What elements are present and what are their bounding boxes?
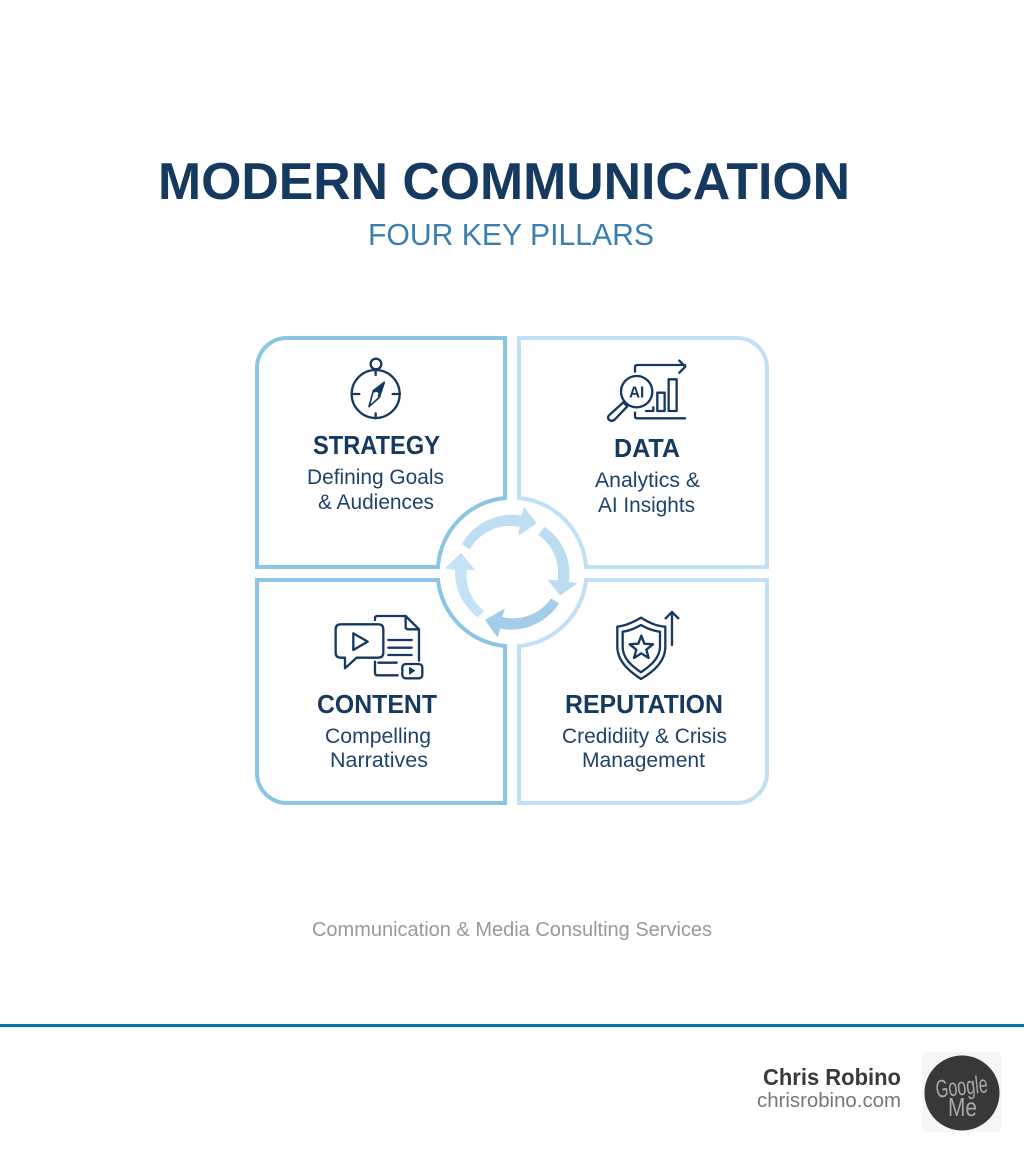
arrow: bottom [485, 598, 559, 638]
strategy description: Defining Goals [307, 466, 444, 489]
panel: data [519, 338, 767, 567]
panel: strategy [257, 338, 505, 567]
arrow: left [445, 553, 484, 617]
icon: compass [352, 359, 400, 418]
icon: shield with star and arrow [617, 612, 678, 679]
data heading: DATA [614, 433, 680, 463]
content description: Compelling [325, 725, 431, 748]
strategy panel border [257, 338, 505, 567]
reputation heading: REPUTATION [565, 689, 723, 719]
panel: reputation [519, 580, 767, 803]
panel: content [257, 580, 505, 803]
reputation description: Credidiity & Crisis [562, 725, 727, 748]
title: MODERN COMMUNICATION [158, 153, 850, 211]
icon: AI magnifier and bar chart [608, 361, 685, 421]
data panel border [519, 338, 767, 567]
arrow: right [538, 527, 577, 596]
icon: video bubble and document [336, 616, 422, 678]
author name: Chris Robino [763, 1064, 901, 1090]
strategy heading: STRATEGY [313, 430, 440, 460]
footer caption: Communication & Media Consulting Services [312, 919, 712, 941]
avatar badge: Google [934, 1070, 989, 1104]
reputation description: Management [582, 749, 705, 772]
content description: Narratives [330, 749, 428, 772]
avatar badge [922, 1052, 1002, 1132]
author website: chrisrobino.com [757, 1090, 901, 1112]
icon: AI magnifier and bar chart: AI [629, 384, 644, 401]
footer divider [0, 1024, 1024, 1027]
data description: Analytics & [595, 469, 700, 492]
data description: AI Insights [598, 494, 695, 517]
avatar badge: Me [948, 1092, 977, 1122]
subtitle: FOUR KEY PILLARS [368, 217, 654, 252]
content panel border [257, 580, 505, 803]
reputation panel border [519, 580, 767, 803]
arrow: top [462, 507, 537, 549]
strategy description: & Audiences [318, 491, 434, 514]
central cycle arrows [445, 507, 577, 638]
content heading: CONTENT [317, 689, 437, 719]
